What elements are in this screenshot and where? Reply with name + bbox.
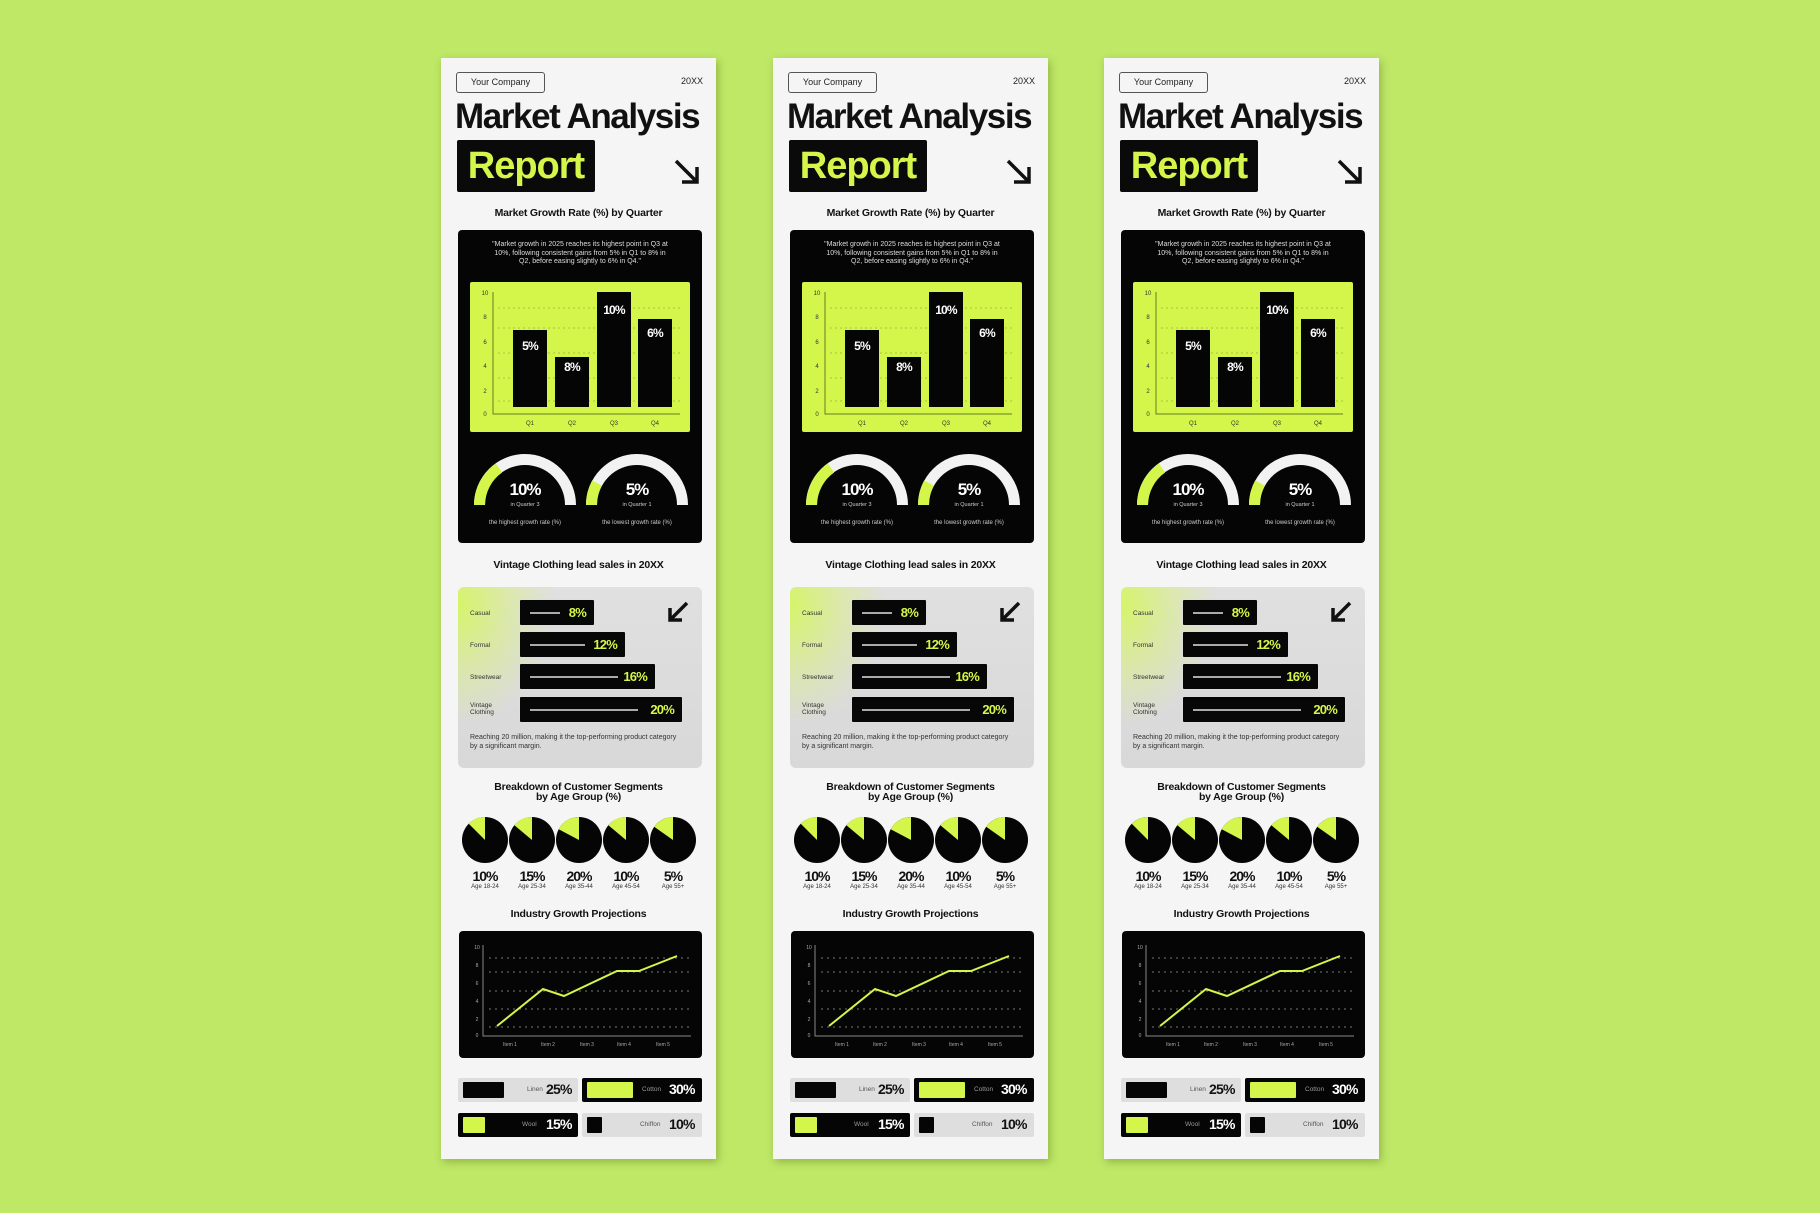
bar chart: Q4	[1314, 421, 1323, 427]
bar: formal: 12%	[593, 637, 617, 652]
pie: 45-54	[935, 817, 981, 890]
line chart: 0	[476, 1033, 479, 1039]
title: Market Analysis	[455, 97, 699, 136]
legend: chiffon: 10%	[1001, 1116, 1027, 1132]
pie: 25-34: Age 25-34	[850, 884, 878, 890]
heading: age segments	[494, 781, 663, 803]
bar chart: 6	[1146, 340, 1150, 346]
pie: 45-54: 10%	[613, 868, 639, 884]
heading: age segments: by Age Group (%)	[1199, 791, 1284, 803]
bar chart: 6	[483, 340, 487, 346]
bar chart	[470, 282, 690, 432]
pie: 25-34	[509, 817, 555, 890]
bar: formal: 12%	[1256, 637, 1280, 652]
pie: 18-24: Age 18-24	[471, 884, 499, 890]
bar: formal	[1182, 631, 1289, 658]
heading: vintage clothing: Vintage Clothing lead sales in 20XX	[1156, 559, 1327, 571]
line chart: Item 4	[617, 1042, 631, 1048]
line chart: 6	[476, 981, 479, 987]
line chart: 0	[808, 1033, 811, 1039]
bar chart: 6%	[1310, 326, 1327, 340]
bar: formal	[851, 631, 958, 658]
pie: 18-24: 10%	[804, 868, 830, 884]
bar chart: Q1	[526, 421, 535, 427]
pie: 55+: 5%	[664, 868, 682, 884]
bar chart: 8	[815, 315, 819, 321]
bar: casual	[851, 599, 927, 626]
legend: wool: Wool	[522, 1121, 537, 1128]
heading: industry growth: Industry Growth Projections	[1174, 908, 1309, 920]
bar chart: 8	[483, 315, 487, 321]
bar chart: 2	[815, 389, 819, 395]
line chart: Item 5	[988, 1042, 1002, 1048]
pie: 18-24	[794, 817, 840, 890]
legend: linen	[1121, 1078, 1241, 1102]
description: Reaching 20 million, making it the top-performing product category by a significant margin.	[470, 734, 676, 750]
bar: streetwear	[1182, 663, 1319, 690]
heading: age segments: Breakdown of Customer Segments	[494, 781, 663, 793]
heading: vintage clothing: Vintage Clothing lead sales in 20XX	[825, 559, 996, 571]
line chart: 2	[476, 1017, 479, 1023]
gauge: lowest growth: the lowest growth rate (%)	[1265, 520, 1335, 526]
bar: streetwear: 16%	[1286, 669, 1310, 684]
line chart: Item 1	[835, 1042, 849, 1048]
pie: 25-34: 15%	[519, 868, 545, 884]
bar: vintage: 20%	[650, 702, 674, 717]
gauge: lowest growth	[1249, 454, 1351, 526]
company tag	[788, 72, 877, 93]
gauge: lowest growth: 5%	[1289, 480, 1312, 499]
bar chart: Q4	[983, 421, 992, 427]
quote text: "Market growth in 2025 reaches its highest point in Q3 at 10%, following consistent gains from 5% in Q1 to 8% in Q2, before easing slightly to 6% in Q4."	[824, 241, 1000, 265]
company tag	[456, 72, 545, 93]
bar chart: 5%	[854, 339, 871, 353]
pie: 55+	[1313, 817, 1359, 890]
label: vintage	[1133, 702, 1157, 716]
line chart: 10	[1137, 945, 1143, 951]
gauge: lowest growth: in Quarter 1	[954, 502, 984, 508]
gauge: highest growth: the highest growth rate (%)	[821, 520, 893, 526]
legend: chiffon	[582, 1113, 702, 1137]
gauge: lowest growth: 5%	[626, 480, 649, 499]
quote text: "Market growth in 2025 reaches its highest point in Q3 at 10%, following consistent gains from 5% in Q1 to 8% in Q2, before easing slightly to 6% in Q4."	[1155, 241, 1331, 265]
legend: cotton	[1245, 1078, 1365, 1102]
heading: industry growth: Industry Growth Projections	[511, 908, 646, 920]
gauge: highest growth: in Quarter 3	[842, 502, 872, 508]
title: Market Analysis	[1118, 97, 1362, 136]
bar chart: 10%	[935, 303, 958, 317]
label: vintage: Vintage	[802, 702, 824, 709]
heading: age segments: Breakdown of Customer Segments	[826, 781, 995, 793]
line chart: Item 5	[1319, 1042, 1333, 1048]
legend: cotton: 30%	[1332, 1081, 1358, 1097]
line chart: Item 5	[656, 1042, 670, 1048]
year: 20XX	[681, 76, 703, 86]
bar chart	[802, 282, 1022, 432]
icon: arrow down-right	[1338, 160, 1362, 184]
label: streetwear: Streetwear	[802, 674, 833, 681]
legend: cotton	[914, 1078, 1034, 1102]
line chart: 2	[808, 1017, 811, 1023]
legend: linen: 25%	[878, 1081, 904, 1097]
description: Reaching 20 million, making it the top-performing product category by a significant margin.	[1133, 734, 1339, 750]
pie: 18-24: 10%	[1135, 868, 1161, 884]
bar chart	[1133, 282, 1353, 432]
legend: linen: Linen	[1190, 1086, 1206, 1093]
legend: cotton: 30%	[1001, 1081, 1027, 1097]
gauge: highest growth: in Quarter 3	[510, 502, 540, 508]
icon: arrow down-left	[1000, 602, 1020, 622]
year: 20XX	[1344, 76, 1366, 86]
pie: 45-54: Age 45-54	[944, 884, 972, 890]
icon: arrow down-right	[674, 160, 699, 184]
line chart	[791, 931, 1034, 1058]
line chart: 4	[476, 999, 479, 1005]
legend: chiffon	[1245, 1113, 1365, 1137]
pie: 45-54: Age 45-54	[1275, 884, 1303, 890]
line chart: 10	[806, 945, 812, 951]
pie: 45-54	[603, 817, 649, 890]
title badge: Report	[789, 140, 927, 192]
bar chart: Q4	[651, 421, 660, 427]
legend: chiffon: 10%	[1332, 1116, 1358, 1132]
pie: 55+	[982, 817, 1028, 890]
heading: market growth: Market Growth Rate (%) by Quarter	[1158, 207, 1325, 219]
line chart: 4	[1139, 999, 1142, 1005]
legend: chiffon: Chiffon	[972, 1121, 992, 1128]
label: vintage	[470, 702, 494, 716]
line chart: 8	[1139, 963, 1142, 969]
legend: wool: 15%	[878, 1116, 904, 1132]
label: streetwear: Streetwear	[470, 674, 501, 681]
bar: casual: 8%	[901, 605, 918, 620]
bar chart: Q2	[568, 421, 577, 427]
bar: streetwear: 16%	[623, 669, 647, 684]
gauge: highest growth	[1137, 454, 1239, 526]
bar: casual	[519, 599, 595, 626]
bar: vintage: 20%	[982, 702, 1006, 717]
bar chart: 4	[483, 364, 487, 370]
panel: report 2	[773, 58, 1048, 1159]
gauge: lowest growth: the lowest growth rate (%)	[602, 520, 672, 526]
bar: formal	[519, 631, 626, 658]
heading: market growth: Market Growth Rate (%) by Quarter	[827, 207, 994, 219]
pie: 45-54: 10%	[945, 868, 971, 884]
icon: arrow down-left	[668, 602, 688, 622]
legend: linen: 25%	[1209, 1081, 1235, 1097]
pie: 25-34: Age 25-34	[518, 884, 546, 890]
line chart: Item 4	[949, 1042, 963, 1048]
bar: formal: 12%	[925, 637, 949, 652]
company tag: Your Company	[471, 77, 530, 87]
legend: cotton	[582, 1078, 702, 1102]
label: formal: Formal	[802, 642, 822, 649]
line chart: 6	[808, 981, 811, 987]
bar chart: 10%	[603, 303, 626, 317]
legend: cotton: Cotton	[974, 1086, 993, 1093]
label: vintage: Clothing	[1133, 709, 1157, 716]
bar chart: 6%	[647, 326, 664, 340]
company tag: Your Company	[1134, 77, 1193, 87]
pie: 35-44: 20%	[898, 868, 924, 884]
pie: 25-34: 15%	[1182, 868, 1208, 884]
gauge: lowest growth	[586, 454, 688, 526]
heading: age segments: by Age Group (%)	[536, 791, 621, 803]
legend: linen	[458, 1078, 578, 1102]
bar chart: 10	[482, 291, 489, 297]
bar chart: 2	[483, 389, 487, 395]
legend: wool	[790, 1113, 910, 1137]
label: formal: Formal	[470, 642, 490, 649]
pie: 35-44	[1219, 817, 1265, 890]
pie: 55+: Age 55+	[662, 884, 684, 890]
pie row	[794, 817, 1028, 890]
bar chart: 5%	[1185, 339, 1202, 353]
company tag	[1119, 72, 1208, 93]
pie: 45-54	[1266, 817, 1312, 890]
legend: cotton: Cotton	[1305, 1086, 1324, 1093]
legend: wool: Wool	[854, 1121, 869, 1128]
pie: 25-34	[841, 817, 887, 890]
title badge: Report: Report	[468, 145, 584, 187]
heading: age segments	[826, 781, 995, 803]
pie: 35-44: Age 35-44	[565, 884, 593, 890]
gauge: highest growth: 10%	[1172, 480, 1204, 499]
bar chart: Q3	[610, 421, 619, 427]
label: streetwear: Streetwear	[1133, 674, 1164, 681]
pie: 35-44: Age 35-44	[897, 884, 925, 890]
line chart: Item 3	[912, 1042, 926, 1048]
icon: arrow down-left	[1331, 602, 1352, 622]
pie: 45-54: Age 45-54	[612, 884, 640, 890]
bar: vintage	[1182, 696, 1346, 723]
label: casual: Casual	[802, 610, 822, 617]
legend: chiffon: Chiffon	[1303, 1121, 1323, 1128]
pie: 18-24: Age 18-24	[803, 884, 831, 890]
legend: chiffon: Chiffon	[640, 1121, 660, 1128]
line chart: Item 4	[1280, 1042, 1294, 1048]
line chart	[1122, 931, 1365, 1058]
legend: cotton: Cotton	[642, 1086, 661, 1093]
line chart: 2	[1139, 1017, 1142, 1023]
heading: age segments: by Age Group (%)	[868, 791, 953, 803]
pie row	[462, 817, 696, 890]
pie: 55+: Age 55+	[1325, 884, 1347, 890]
line chart: 6	[1139, 981, 1142, 987]
line chart: 10	[474, 945, 480, 951]
label: casual: Casual	[1133, 610, 1153, 617]
bar chart: 6	[815, 340, 819, 346]
title: Market Analysis	[787, 97, 1031, 136]
bar chart: Q2	[1231, 421, 1240, 427]
legend: linen: 25%	[546, 1081, 572, 1097]
legend: linen: Linen	[527, 1086, 543, 1093]
pie: 18-24: 10%	[472, 868, 498, 884]
pie: 35-44: 20%	[566, 868, 592, 884]
bar: casual: 8%	[1232, 605, 1249, 620]
bar chart: 4	[815, 364, 819, 370]
gauge: lowest growth: 5%	[958, 480, 981, 499]
pie: 35-44	[556, 817, 602, 890]
bar: vintage: 20%	[1313, 702, 1337, 717]
label: formal: Formal	[1133, 642, 1153, 649]
bar chart: Q2	[900, 421, 909, 427]
bar: streetwear	[851, 663, 988, 690]
title badge: Report	[1120, 140, 1258, 192]
legend: chiffon	[914, 1113, 1034, 1137]
pie: 18-24	[1125, 817, 1171, 890]
bar chart: 0	[483, 412, 487, 418]
bar chart: 8%	[896, 360, 913, 374]
pie: 45-54: 10%	[1276, 868, 1302, 884]
line chart: Item 2	[1204, 1042, 1218, 1048]
bar chart: 0	[1146, 412, 1150, 418]
line chart: Item 3	[1243, 1042, 1257, 1048]
bar chart: 10	[1145, 291, 1152, 297]
line chart	[459, 931, 702, 1058]
heading: age segments: Breakdown of Customer Segments	[1157, 781, 1326, 793]
gauge: lowest growth: in Quarter 1	[622, 502, 652, 508]
legend: linen: Linen	[859, 1086, 875, 1093]
bar chart: 0	[815, 412, 819, 418]
panel: growth chart card	[458, 230, 702, 543]
line chart: 4	[808, 999, 811, 1005]
panel: report 3	[1104, 58, 1379, 1159]
company tag: Your Company	[803, 77, 862, 87]
bar: casual: 8%	[569, 605, 586, 620]
panel: growth chart card	[790, 230, 1034, 543]
quote text: "Market growth in 2025 reaches its highest point in Q3 at 10%, following consistent gains from 5% in Q1 to 8% in Q2, before easing slightly to 6% in Q4."	[492, 241, 668, 265]
bar chart: 6%	[979, 326, 996, 340]
pie: 55+: 5%	[1327, 868, 1345, 884]
panel: category sales	[790, 587, 1034, 768]
bar chart: 2	[1146, 389, 1150, 395]
gauge: highest growth: 10%	[509, 480, 541, 499]
pie: 35-44: 20%	[1229, 868, 1255, 884]
legend: linen	[790, 1078, 910, 1102]
pie: 25-34: 15%	[851, 868, 877, 884]
pie: 55+: Age 55+	[994, 884, 1016, 890]
description: Reaching 20 million, making it the top-performing product category by a significant margin.	[802, 734, 1008, 750]
bar chart: 10%	[1266, 303, 1289, 317]
line chart: Item 1	[1166, 1042, 1180, 1048]
pie: 55+: 5%	[996, 868, 1014, 884]
pie: 25-34	[1172, 817, 1218, 890]
legend: wool: 15%	[546, 1116, 572, 1132]
legend: chiffon: 10%	[669, 1116, 695, 1132]
title badge: Report: Report	[800, 145, 916, 187]
pie: 35-44	[888, 817, 934, 890]
gauge: highest growth: in Quarter 3	[1173, 502, 1203, 508]
label: vintage: Vintage	[1133, 702, 1155, 709]
line chart: Item 3	[580, 1042, 594, 1048]
bar chart: Q1	[1189, 421, 1198, 427]
gauge: highest growth	[806, 454, 908, 526]
label: vintage: Clothing	[470, 709, 494, 716]
bar chart: Q3	[942, 421, 951, 427]
bar chart: 4	[1146, 364, 1150, 370]
pie: 25-34: Age 25-34	[1181, 884, 1209, 890]
legend: wool	[458, 1113, 578, 1137]
legend: wool: Wool	[1185, 1121, 1200, 1128]
title badge: Report: Report	[1131, 145, 1247, 187]
gauge: lowest growth	[918, 454, 1020, 526]
pie: 35-44: Age 35-44	[1228, 884, 1256, 890]
heading: vintage clothing: Vintage Clothing lead sales in 20XX	[493, 559, 664, 571]
heading: industry growth: Industry Growth Projections	[843, 908, 978, 920]
bar: vintage	[519, 696, 683, 723]
heading: age segments	[1157, 781, 1326, 803]
bar: casual	[1182, 599, 1258, 626]
gauge: highest growth	[474, 454, 576, 526]
gauge: highest growth: the highest growth rate (%)	[489, 520, 561, 526]
title badge: Report	[457, 140, 595, 192]
panel: growth chart card	[1121, 230, 1365, 543]
label: casual: Casual	[470, 610, 490, 617]
panel: category sales	[1121, 587, 1365, 768]
bar chart: 8%	[1227, 360, 1244, 374]
bar chart: 5%	[522, 339, 539, 353]
panel: category sales	[458, 587, 702, 768]
gauge: lowest growth: in Quarter 1	[1285, 502, 1315, 508]
bar chart: 10	[814, 291, 821, 297]
year: 20XX	[1013, 76, 1035, 86]
gauge: highest growth: 10%	[841, 480, 873, 499]
panel: report 1	[441, 58, 716, 1159]
bar chart: 8	[1146, 315, 1150, 321]
pie: 55+	[650, 817, 696, 890]
gauge: lowest growth: the lowest growth rate (%)	[934, 520, 1004, 526]
line chart: Item 2	[873, 1042, 887, 1048]
bar chart: Q1	[858, 421, 867, 427]
label: vintage	[802, 702, 826, 716]
gauge: highest growth: the highest growth rate (%)	[1152, 520, 1224, 526]
bar chart: 8%	[564, 360, 581, 374]
label: vintage: Vintage	[470, 702, 492, 709]
bar: vintage	[851, 696, 1015, 723]
line chart: 8	[808, 963, 811, 969]
line chart: 8	[476, 963, 479, 969]
line chart: 0	[1139, 1033, 1142, 1039]
heading: market growth: Market Growth Rate (%) by Quarter	[495, 207, 662, 219]
bar: streetwear	[519, 663, 656, 690]
pie: 18-24: Age 18-24	[1134, 884, 1162, 890]
legend: cotton: 30%	[669, 1081, 695, 1097]
legend: wool: 15%	[1209, 1116, 1235, 1132]
line chart: Item 1	[503, 1042, 517, 1048]
line chart: Item 2	[541, 1042, 555, 1048]
bar chart: Q3	[1273, 421, 1282, 427]
legend: wool	[1121, 1113, 1241, 1137]
icon: arrow down-right	[1006, 160, 1031, 184]
bar: streetwear: 16%	[955, 669, 979, 684]
pie row	[1125, 817, 1359, 890]
label: vintage: Clothing	[802, 709, 826, 716]
pie: 18-24	[462, 817, 508, 890]
